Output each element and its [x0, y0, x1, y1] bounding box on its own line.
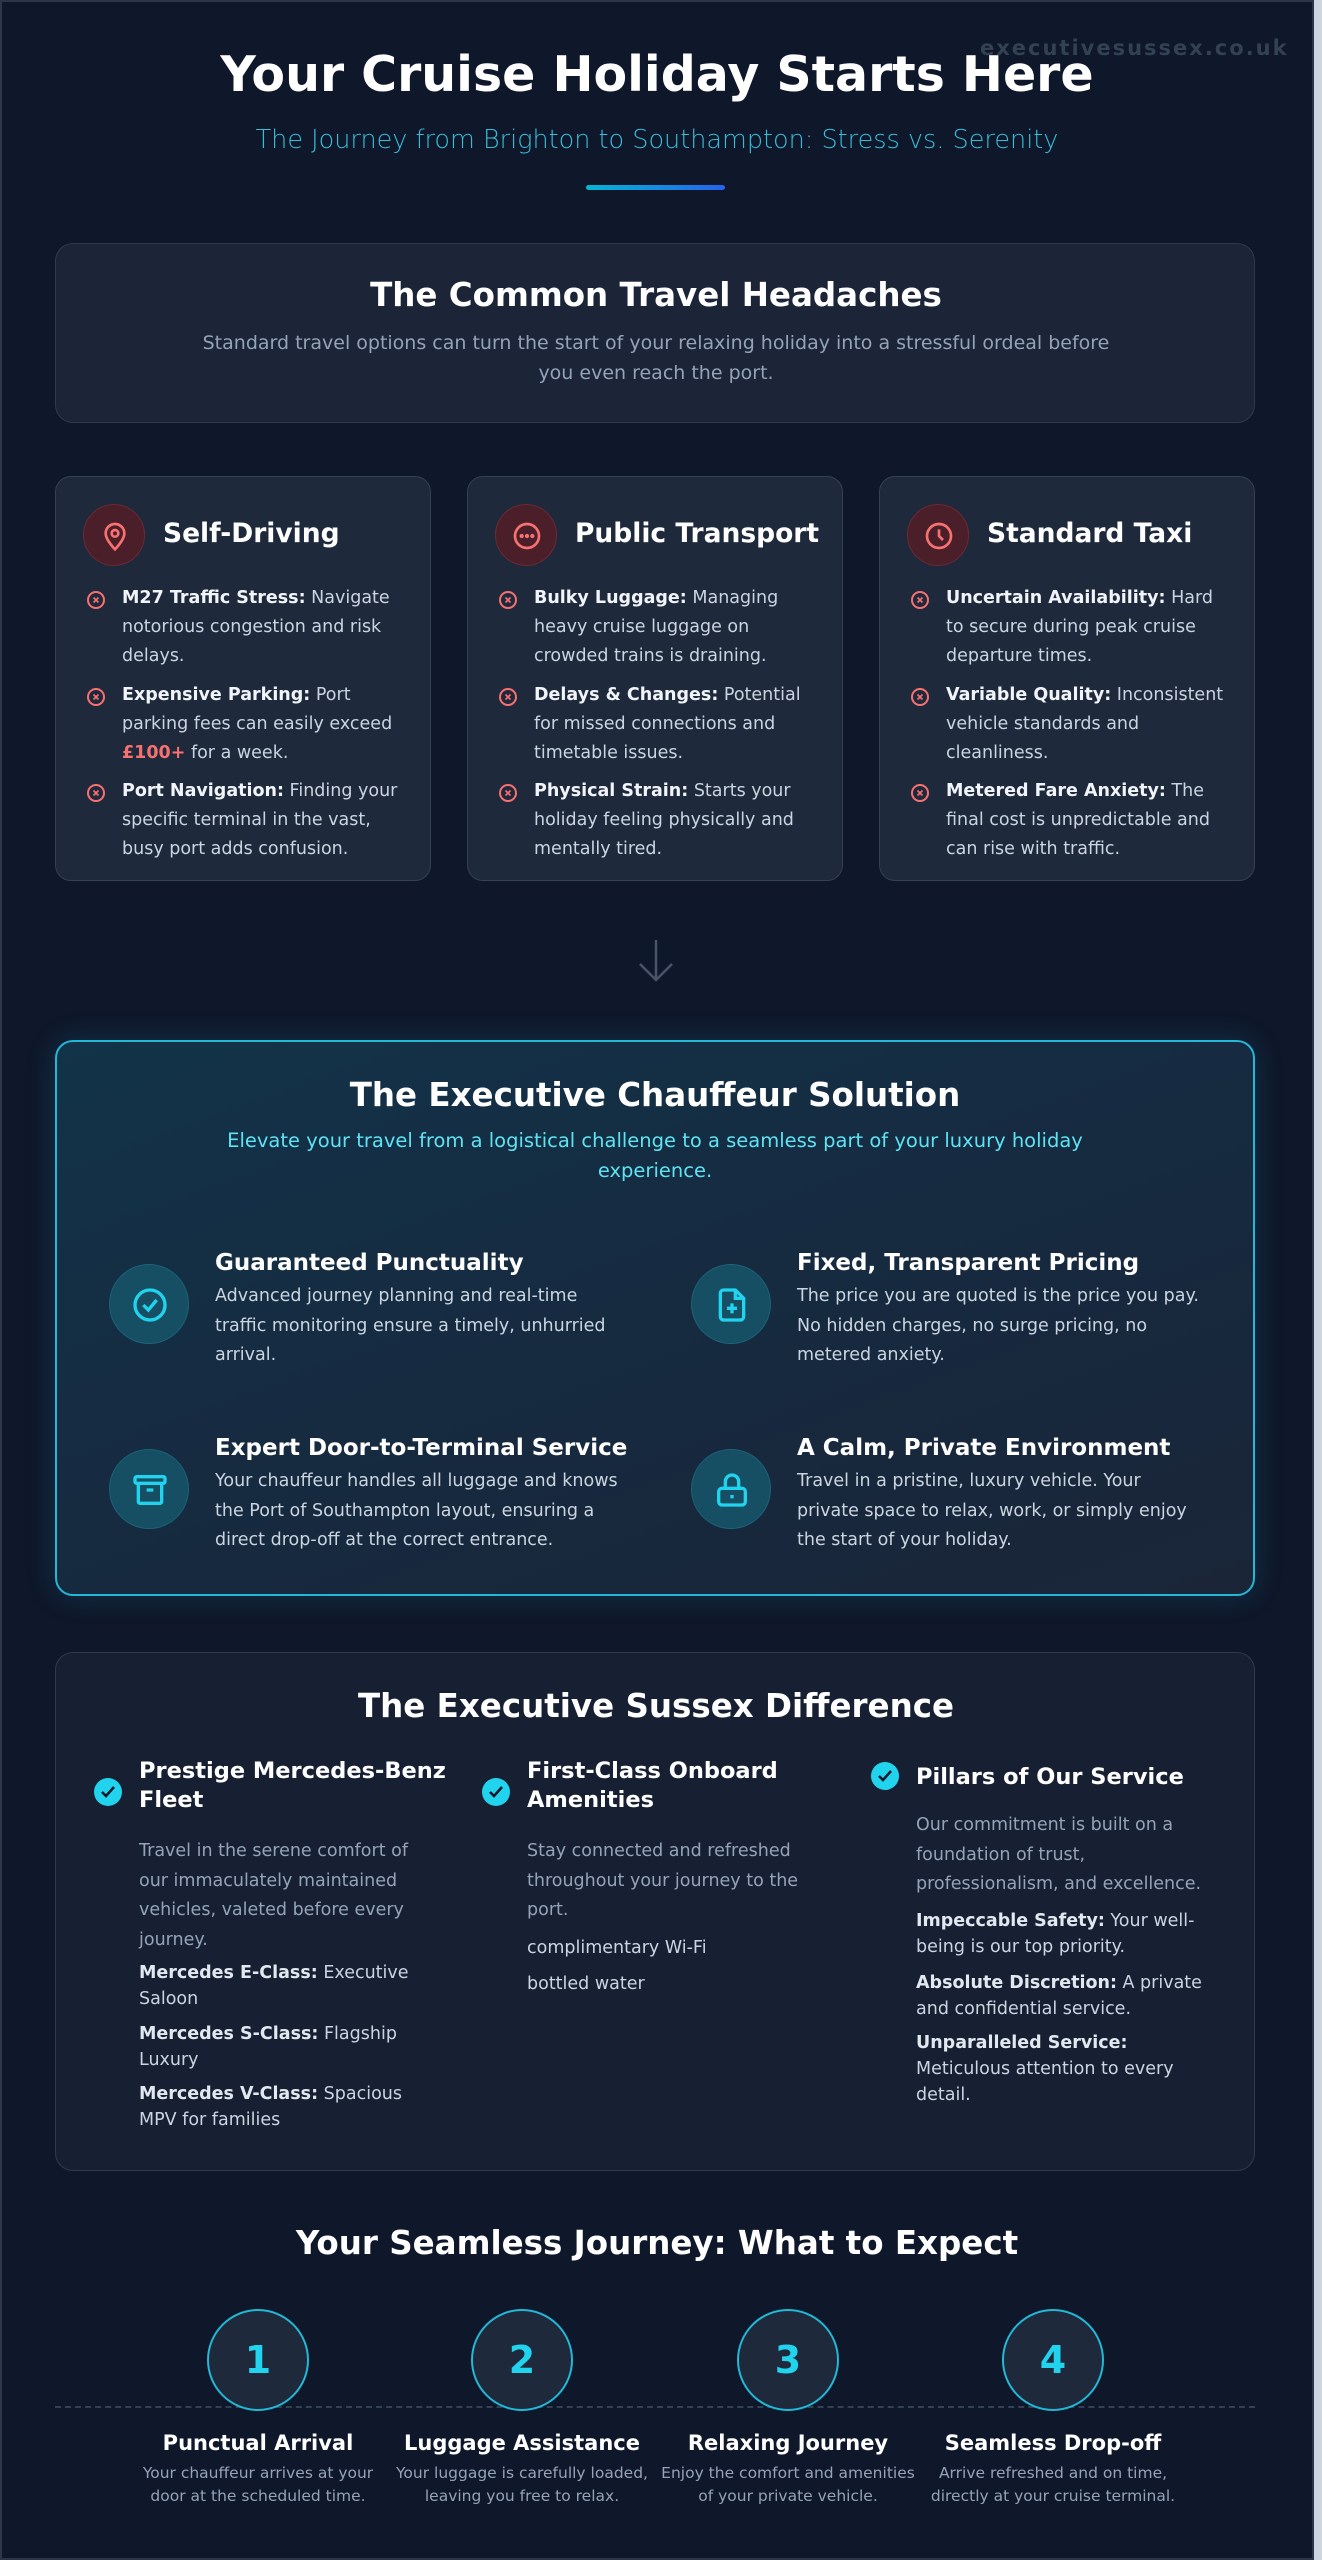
- watermark: executivesussex.co.uk: [980, 36, 1289, 60]
- number circle: [471, 2309, 573, 2411]
- solution subtitle: Elevate your travel from a logistical challenge to a seamless part of your luxury holiday: [227, 1129, 1083, 1152]
- panel: headaches intro: [55, 243, 1255, 423]
- column: pillars: Unparalleled Service: Meticulous attention to every detail.: [916, 2033, 1174, 2105]
- feature: door-to-terminal: [109, 1435, 627, 1550]
- panel: chauffeur solution: [55, 1040, 1255, 1596]
- icon: lock: [691, 1449, 771, 1529]
- icon: file plus: [691, 1264, 771, 1344]
- feature: punctuality: Advanced journey planning and real-time traffic monitoring ensure a timely, unhurried arrival.: [215, 1286, 606, 1365]
- number circle: 3: [775, 2338, 801, 2382]
- card: standard taxi: [879, 476, 1255, 881]
- intro text: Standard travel options can turn the start of your relaxing holiday into a stressful ordeal before: [203, 332, 1109, 354]
- feature: punctuality: [109, 1250, 606, 1365]
- intro text: [203, 332, 1109, 384]
- column: pillars: Pillars of Our Service: [916, 1764, 1184, 1790]
- icon: check: [482, 1778, 510, 1806]
- bullet: Metered Fare Anxiety: The final cost is unpredictable and can rise with traffic.: [946, 781, 1210, 859]
- step 2: Luggage Assistance: [404, 2431, 640, 2455]
- step 3: [661, 2309, 915, 2505]
- column: fleet: Travel in the serene comfort of our immaculately maintained vehicles, valeted before every journey.: [139, 1841, 408, 1950]
- bullet: Port Navigation: Finding your specific terminal in the vast, busy port adds confusion.: [122, 781, 397, 859]
- icon: message dots: [495, 504, 557, 566]
- feature: pricing: [691, 1250, 1199, 1365]
- step 1: Your chauffeur arrives at your: [143, 2464, 373, 2482]
- step 3: Enjoy the comfort and amenities: [661, 2464, 915, 2482]
- icon: check: [871, 1762, 899, 1790]
- bullet: Expensive Parking: Port parking fees can easily exceed £100+ for a week.: [122, 685, 392, 763]
- heading: solution: The Executive Chauffeur Solution: [350, 1076, 960, 1114]
- number circle: 4: [1040, 2338, 1066, 2382]
- step 2: leaving you free to relax.: [425, 2487, 619, 2505]
- column: amenities: First-Class Onboard: [527, 1758, 778, 1784]
- timeline dashed line: [55, 2406, 1255, 2408]
- card title: Self-Driving: [163, 518, 340, 549]
- column: amenities: bottled water: [527, 1974, 645, 1994]
- step 4: Seamless Drop-off: [945, 2431, 1161, 2455]
- icon: clock: [907, 504, 969, 566]
- bullet: M27 Traffic Stress: Navigate notorious congestion and risk delays.: [122, 588, 390, 666]
- number circle: [1002, 2309, 1104, 2411]
- step 2: [396, 2309, 648, 2505]
- card title: Standard Taxi: [987, 518, 1192, 549]
- card title: Public Transport: [575, 518, 819, 549]
- feature: punctuality: Guaranteed Punctuality: [215, 1250, 524, 1276]
- number circle: 1: [245, 2338, 271, 2382]
- column: fleet: [94, 1758, 446, 2130]
- feature: door-to-terminal: Your chauffeur handles all luggage and knows the Port of Southampton layout, ensuring a direct drop-off at the correct entrance.: [215, 1471, 618, 1550]
- bullet: Physical Strain: Starts your holiday feeling physically and mentally tired.: [534, 781, 794, 859]
- step 3: of your private vehicle.: [698, 2487, 878, 2505]
- column: amenities: [482, 1758, 798, 1994]
- step 1: door at the scheduled time.: [150, 2487, 366, 2505]
- feature: private environment: A Calm, Private Environment: [797, 1435, 1170, 1461]
- bullet: Bulky Luggage: Managing heavy cruise luggage on crowded trains is draining.: [534, 588, 778, 666]
- feature: pricing: The price you are quoted is the price you pay. No hidden charges, no surge pricing, no metered anxiety.: [797, 1286, 1199, 1365]
- solution subtitle: experience.: [598, 1159, 712, 1182]
- heading: difference: The Executive Sussex Difference: [358, 1687, 954, 1725]
- column: fleet: Prestige Mercedes-Benz: [139, 1758, 446, 1784]
- heading: headaches: The Common Travel Headaches: [370, 276, 942, 314]
- arrow: down: [639, 940, 673, 982]
- accent bar: [586, 185, 725, 190]
- column: pillars: Our commitment is built on a foundation of trust, professionalism, and excellence.: [916, 1815, 1201, 1894]
- column: fleet: Mercedes E-Class: Executive Saloon: [139, 1963, 409, 2009]
- heading: seamless journey: Your Seamless Journey: What to Expect: [296, 2224, 1018, 2262]
- bullet: Delays & Changes: Potential for missed connections and timetable issues.: [534, 685, 801, 763]
- column: amenities: Amenities: [527, 1787, 654, 1813]
- title: Your Cruise Holiday Starts Here: [220, 46, 1094, 103]
- step 4: [931, 2309, 1175, 2505]
- number circle: [207, 2309, 309, 2411]
- step 4: Arrive refreshed and on time,: [939, 2464, 1167, 2482]
- bullet: Uncertain Availability: Hard to secure during peak cruise departure times.: [946, 588, 1213, 666]
- intro text: you even reach the port.: [538, 362, 774, 384]
- number circle: [737, 2309, 839, 2411]
- number circle: 2: [509, 2338, 535, 2382]
- column: fleet: Fleet: [139, 1787, 203, 1813]
- panel: executive sussex difference: [55, 1652, 1255, 2171]
- column: pillars: Impeccable Safety: Your well-being is our top priority.: [916, 1911, 1194, 1957]
- step 2: Your luggage is carefully loaded,: [396, 2464, 648, 2482]
- feature: private environment: Travel in a pristine, luxury vehicle. Your private space to relax, work, or simply enjoy the start of your holiday.: [797, 1471, 1187, 1550]
- column: fleet: Mercedes S-Class: Flagship Luxury: [139, 2024, 397, 2070]
- column: pillars: Absolute Discretion: A private and confidential service.: [916, 1973, 1202, 2019]
- feature: pricing: Fixed, Transparent Pricing: [797, 1250, 1139, 1276]
- feature: door-to-terminal: Expert Door-to-Terminal Service: [215, 1435, 627, 1461]
- card: public transport: [467, 476, 843, 881]
- column: amenities: Stay connected and refreshed throughout your journey to the port.: [527, 1841, 798, 1920]
- step 3: Relaxing Journey: [688, 2431, 888, 2455]
- solution subtitle: [227, 1129, 1083, 1182]
- card: self-driving: [55, 476, 431, 881]
- column: pillars: [871, 1762, 1202, 2105]
- icon: archive: [109, 1449, 189, 1529]
- icon: check: [94, 1778, 122, 1806]
- feature: private environment: [691, 1435, 1187, 1550]
- column: fleet: Mercedes V-Class: Spacious MPV for families: [139, 2084, 402, 2130]
- step 1: Punctual Arrival: [163, 2431, 353, 2455]
- step 1: [142, 2309, 374, 2505]
- step 4: directly at your cruise terminal.: [931, 2487, 1175, 2505]
- icon: map pin: [83, 504, 145, 566]
- icon: check circle: [109, 1264, 189, 1344]
- column: amenities: complimentary Wi-Fi: [527, 1938, 707, 1958]
- subtitle: The Journey from Brighton to Southampton: Stress vs. Serenity: [256, 125, 1058, 155]
- bullet: Variable Quality: Inconsistent vehicle standards and cleanliness.: [946, 685, 1223, 763]
